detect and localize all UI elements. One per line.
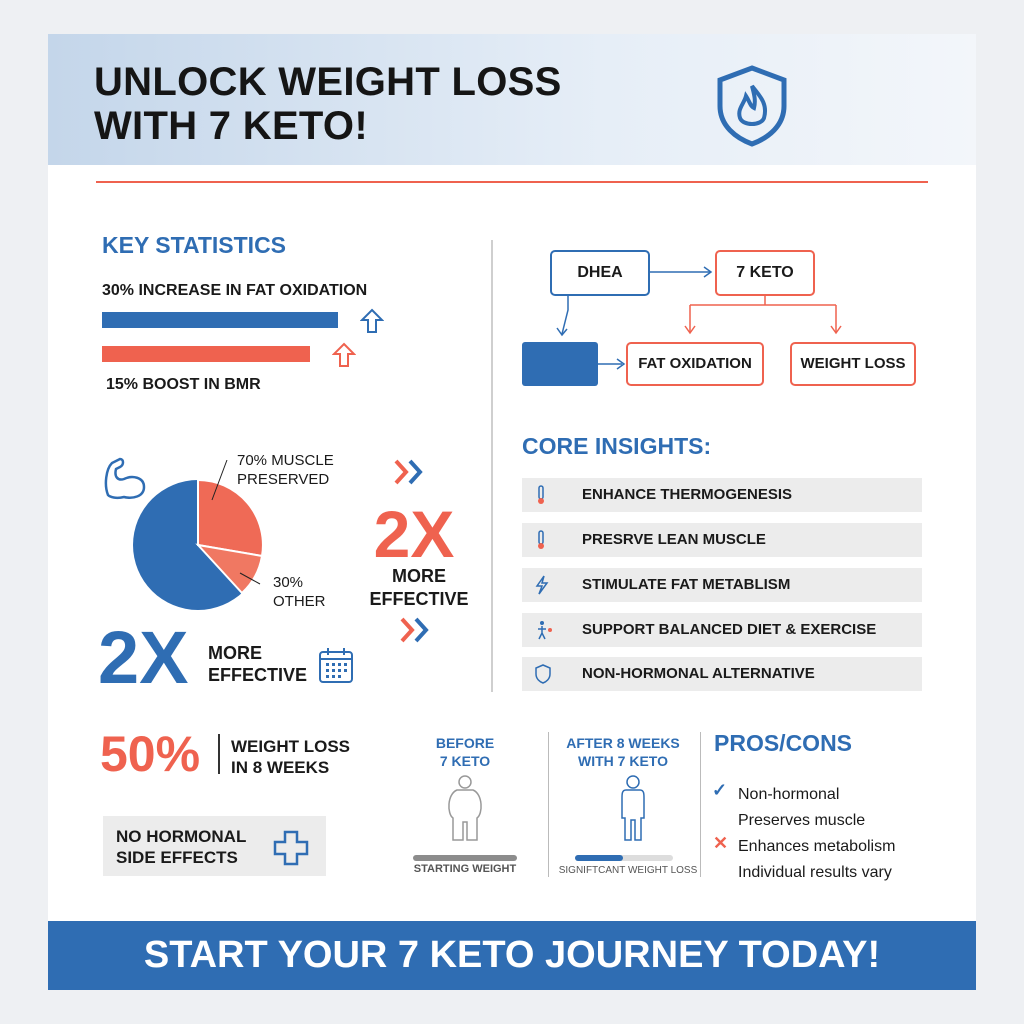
- title: [94, 60, 562, 148]
- title: WITH 7 KETO!: [94, 104, 368, 148]
- pie label 70%: 70% MUSCLE: [237, 452, 334, 469]
- pie label 30%: [273, 574, 326, 610]
- insight 2: PRESRVE LEAN MUSCLE: [582, 531, 766, 548]
- footer banner: [48, 921, 976, 990]
- icon: calendar: [319, 648, 353, 683]
- box weight loss: [790, 342, 916, 386]
- flow diagram: [522, 250, 916, 386]
- panel: key statistics: 15% BOOST IN BMR: [106, 376, 261, 393]
- insight 2: [522, 523, 922, 557]
- 2X blue stat: [98, 616, 353, 699]
- heading: KEY STATISTICS: [102, 232, 286, 258]
- pie label 70%: [237, 452, 334, 488]
- pros/cons: PROS/CONS: [714, 730, 852, 756]
- box fat oxidation: [626, 342, 764, 386]
- insight 5: NON-HORMONAL ALTERNATIVE: [582, 665, 815, 682]
- title: UNLOCK WEIGHT LOSS: [94, 60, 562, 104]
- 50% weight loss: 50%: [100, 726, 200, 782]
- insight 3: STIMULATE FAT METABLISM: [582, 576, 790, 593]
- box DHEA: [550, 250, 650, 296]
- icon: muscle arm: [104, 458, 146, 500]
- box solid blue: [522, 342, 598, 386]
- before panel: STARTING WEIGHT: [414, 863, 516, 875]
- before panel: [413, 735, 517, 875]
- box DHEA: DHEA: [577, 264, 623, 281]
- 50% weight loss: IN 8 WEEKS: [231, 758, 329, 777]
- red divider line: [96, 181, 928, 183]
- after panel: SIGNIFTCANT WEIGHT LOSS: [559, 865, 697, 876]
- vertical divider: [491, 240, 493, 692]
- footer banner: START YOUR 7 KETO JOURNEY TODAY!: [144, 934, 880, 976]
- stat 1: 30% INCREASE IN FAT OXIDATION: [102, 282, 367, 299]
- pie label 30%: OTHER: [273, 593, 326, 610]
- pie chart: [133, 460, 262, 610]
- 2X red stat with chevrons: 2X: [374, 497, 454, 571]
- panel: key statistics: [102, 232, 384, 393]
- box weight loss: WEIGHT LOSS: [800, 355, 906, 372]
- stat 2: [102, 346, 310, 362]
- before panel: BEFORE: [436, 735, 494, 751]
- pros/cons: Preserves muscle: [738, 812, 865, 829]
- 50% weight loss: [100, 726, 350, 782]
- insight 1: [522, 478, 922, 512]
- header band: [48, 34, 976, 165]
- 2X blue stat: EFFECTIVE: [208, 665, 307, 685]
- no hormonal side effects box: SIDE EFFECTS: [116, 848, 238, 867]
- no hormonal side effects box: [103, 816, 326, 876]
- insight 5: [522, 657, 922, 691]
- 2X blue stat: MORE: [208, 643, 262, 663]
- core insights heading: CORE INSIGHTS:: [522, 433, 711, 459]
- insight 4: [522, 613, 922, 647]
- 2X blue stat: 2X: [98, 616, 189, 699]
- after panel: [559, 735, 697, 876]
- icon: shield flame: [718, 65, 786, 147]
- pie label 70%: PRESERVED: [237, 471, 329, 488]
- pros/cons: ✓: [712, 780, 727, 800]
- 2X red stat with chevrons: [369, 460, 468, 642]
- pros/cons: [712, 730, 895, 881]
- box fat oxidation: FAT OXIDATION: [638, 355, 752, 372]
- pros/cons: ✕: [713, 833, 728, 853]
- 2X red stat with chevrons: MORE: [392, 566, 446, 586]
- after panel: WITH 7 KETO: [578, 753, 668, 769]
- pie label 30%: 30%: [273, 574, 303, 591]
- insight 1: ENHANCE THERMOGENESIS: [582, 486, 792, 503]
- after panel: AFTER 8 WEEKS: [566, 735, 680, 751]
- insight 3: [522, 568, 922, 602]
- box 7 KETO: [715, 250, 815, 296]
- 50% weight loss: WEIGHT LOSS: [231, 737, 350, 756]
- 2X red stat with chevrons: EFFECTIVE: [369, 589, 468, 609]
- pros/cons: Individual results vary: [738, 864, 892, 881]
- pros/cons: Non-hormonal: [738, 786, 839, 803]
- insight 4: SUPPORT BALANCED DIET & EXERCISE: [582, 621, 876, 638]
- box 7 KETO: 7 KETO: [736, 264, 794, 281]
- no hormonal side effects box: NO HORMONAL: [116, 827, 246, 846]
- pros/cons: Enhances metabolism: [738, 838, 895, 855]
- before panel: 7 KETO: [440, 753, 490, 769]
